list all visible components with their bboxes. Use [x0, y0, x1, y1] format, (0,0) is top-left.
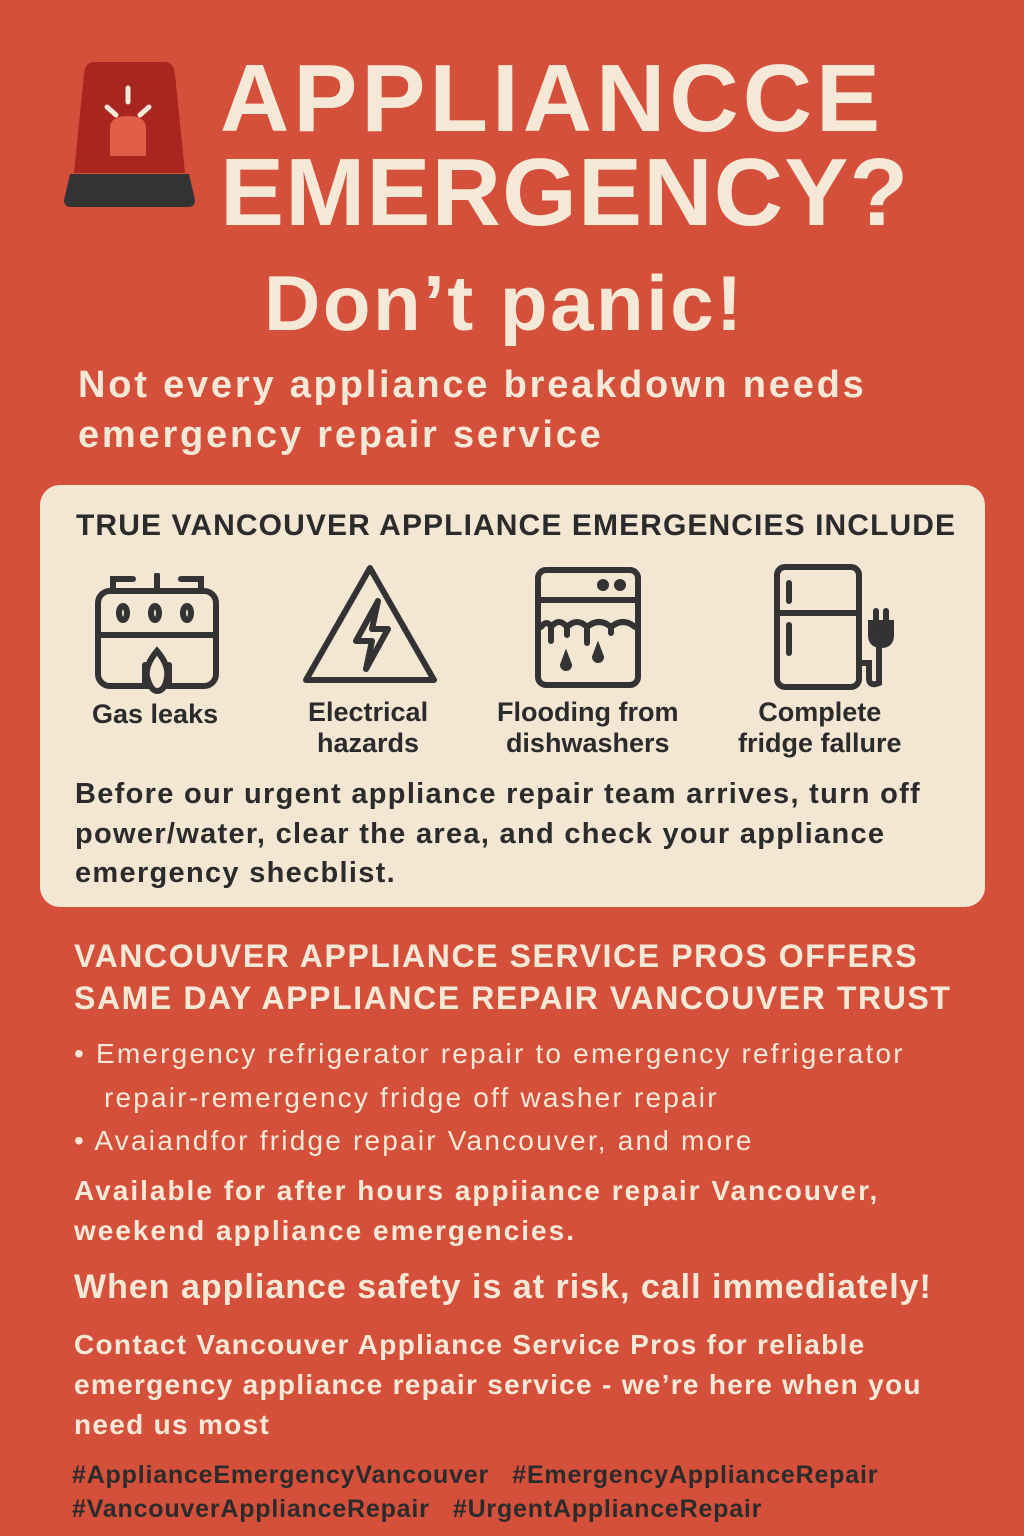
services heading [74, 938, 952, 1016]
labels: Gas leaks [92, 699, 218, 729]
intro text: Not every appliance breakdown needs [78, 364, 867, 406]
intro text: emergency repair service [78, 414, 604, 456]
icon: stove gas [95, 573, 219, 694]
panel: emergencies: Electrical [308, 697, 428, 727]
services heading: SAME DAY APPLIANCE REPAIR VANCOUVER TRUST [74, 980, 952, 1016]
title: APPLIANCCE [220, 45, 884, 152]
availability text: Available for after hours appiiance repair Vancouver, [74, 1175, 879, 1206]
services heading: VANCOUVER APPLIANCE SERVICE PROS OFFERS [74, 938, 918, 974]
intro text [78, 364, 867, 456]
panel: emergencies: dishwashers [506, 728, 670, 758]
panel heading: TRUE VANCOUVER APPLIANCE EMERGENCIES INCLUDE [76, 509, 956, 542]
panel: emergencies: fridge fallure [738, 728, 902, 758]
icon: electrical triangle [303, 565, 437, 683]
title: EMERGENCY? [220, 139, 909, 246]
panel: emergencies: Complete [758, 697, 881, 727]
icon: dishwasher flood [535, 567, 641, 688]
bullet list: • Avaiandfor fridge repair Vancouver, and more [74, 1125, 754, 1156]
contact text: Contact Vancouver Appliance Service Pros for reliable [74, 1329, 865, 1360]
bullet list [74, 1038, 905, 1156]
contact text [74, 1329, 922, 1440]
subtitle: don't panic: Don’t panic! [264, 259, 745, 347]
call to action: When appliance safety is at risk, call immediately! [74, 1268, 932, 1306]
title [220, 45, 909, 246]
panel note: power/water, clear the area, and check your appliance [75, 818, 885, 850]
availability text: weekend appliance emergencies. [74, 1215, 576, 1246]
icon: fridge plug [774, 564, 894, 690]
icon: siren [64, 62, 195, 207]
panel note [75, 778, 921, 889]
hashtags: #VancouverApplianceRepair #UrgentApplianceRepair [72, 1495, 762, 1523]
hashtags [72, 1461, 878, 1523]
panel note: Before our urgent appliance repair team arrives, turn off [75, 778, 921, 810]
contact text: emergency appliance repair service - we’re here when you [74, 1369, 922, 1400]
panel: emergencies: Flooding from [497, 697, 678, 727]
hashtags: #ApplianceEmergencyVancouver #EmergencyApplianceRepair [72, 1461, 878, 1489]
panel note: emergency shecblist. [75, 857, 396, 889]
contact text: need us most [74, 1409, 270, 1440]
availability text [74, 1175, 879, 1246]
panel: emergencies: hazards [317, 728, 419, 758]
bullet list: repair-remergency fridge off washer repair [104, 1082, 719, 1112]
bullet list: • Emergency refrigerator repair to emergency refrigerator [74, 1038, 905, 1069]
panel: emergencies [40, 485, 985, 907]
